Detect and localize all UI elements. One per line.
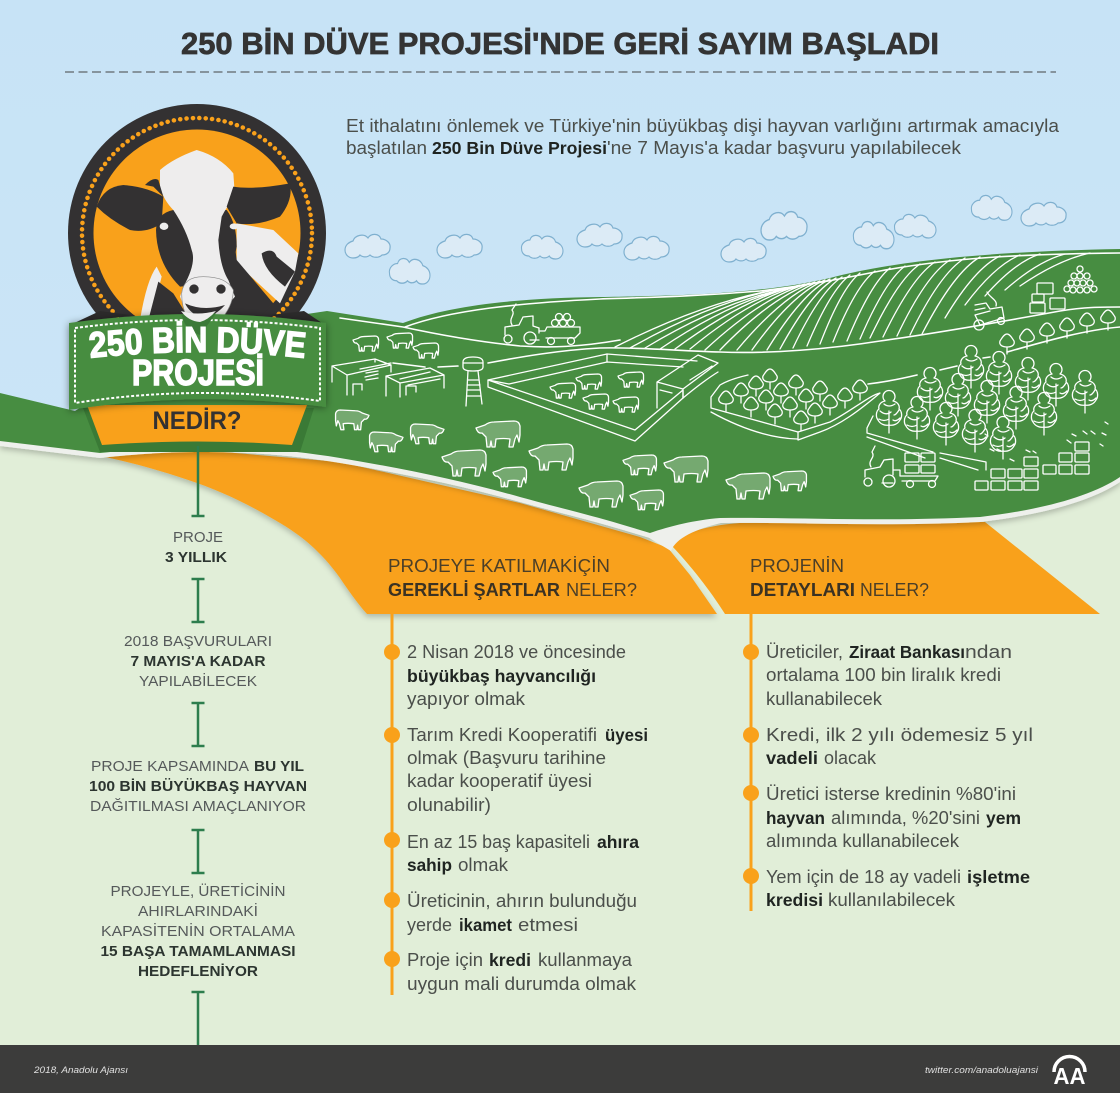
clouds	[345, 195, 1066, 284]
fact: animal target: 100 BİN BÜYÜKBAŞ HAYVAN	[89, 778, 307, 795]
hill contour lines	[340, 253, 1120, 384]
condition 2	[407, 725, 648, 815]
condition 5: kullanmaya	[538, 950, 633, 970]
detail 4: işletme	[967, 867, 1030, 887]
fact: applications: YAPILABİLECEK	[139, 672, 257, 690]
intro text: başlatılan	[346, 138, 427, 158]
detail 1: Üreticiler,	[766, 642, 843, 662]
farm buildings	[332, 359, 444, 397]
fact: applications: 2018 BAŞVURULARI	[124, 634, 272, 650]
intro text: 'ne 7 Mayıs'a kadar başvuru yapılabilecek	[607, 138, 962, 158]
detail 2: Kredi, ilk 2 yılı ödemesiz 5 yıl	[766, 725, 1033, 745]
cattle pen and barn	[488, 354, 718, 441]
fact: capacity target: AHIRLARINDAKİ	[138, 902, 258, 920]
detail 4: kullanılabilecek	[828, 890, 956, 910]
medallion circle	[68, 104, 326, 362]
sky background	[0, 0, 1120, 480]
detail 3: yem	[986, 808, 1021, 828]
condition 3	[407, 832, 639, 875]
tree row	[1000, 310, 1115, 354]
road lines	[867, 416, 986, 470]
ribbon folds	[70, 311, 325, 326]
detail 3: Üretici isterse kredinin %80'ini	[766, 784, 1016, 804]
badge: cow medallion and ribbon: PROJESİ	[132, 352, 264, 393]
condition 3: sahip	[407, 855, 452, 875]
orange tab	[87, 405, 307, 445]
outline cows near sheds and in pen	[353, 333, 644, 412]
condition 2: üyesi	[605, 725, 648, 745]
detail 2	[766, 725, 1033, 768]
orange banner: details	[672, 522, 1100, 614]
hay bales top right	[1030, 266, 1097, 313]
heading: details: PROJENİN	[750, 556, 844, 576]
condition 1: 2 Nisan 2018 ve öncesinde	[407, 642, 626, 662]
badge: cow medallion and ribbon: 250 BİN DÜVE	[89, 320, 306, 358]
tractor with square bales	[864, 446, 938, 488]
fact: project duration	[165, 530, 228, 566]
detail 3: alımında, %20'sini	[831, 808, 980, 828]
intro text: 250 Bin Düve Projesi	[432, 138, 607, 158]
condition 3: En az 15 baş kapasiteli	[407, 832, 590, 852]
intro text: Et ithalatını önlemek ve Türkiye'nin büyükbaş dişi hayvan varlığını artırmak amacıyla	[346, 116, 1060, 136]
cow portrait	[97, 150, 298, 323]
detail 2: olacak	[824, 748, 877, 768]
fact: animal target	[89, 759, 307, 815]
fact: applications	[124, 634, 272, 690]
condition 3: olmak	[458, 855, 509, 875]
copyright: 2018, Anadolu Ajansı	[33, 1065, 128, 1076]
fact: animal target: DAĞITILMASI AMAÇLANIYOR	[90, 798, 306, 815]
detail 3: alımında kullanabilecek	[766, 831, 960, 851]
badge: cow medallion and ribbon	[64, 104, 330, 452]
list: details	[743, 613, 1033, 911]
fact: capacity target: HEDEFLENİYOR	[138, 963, 259, 980]
large trees	[876, 346, 1098, 459]
orchard	[711, 369, 880, 440]
condition 5: uygun mali durumda olmak	[407, 974, 637, 994]
fact: animal target: PROJE KAPSAMINDA	[91, 759, 249, 775]
heading: details: NELER?	[860, 580, 929, 600]
fact: applications: 7 MAYIS'A KADAR	[130, 654, 266, 670]
fact: capacity target: PROJEYLE, ÜRETİCİNİN	[110, 882, 286, 900]
chin overlapping ribbon	[181, 313, 216, 335]
detail 1: ndan	[965, 642, 1012, 662]
grazing cows	[336, 410, 806, 510]
NEDİR label: NEDİR?	[152, 407, 242, 435]
detail 3: hayvan	[766, 808, 825, 828]
heading: conditions: PROJEYE KATILMAKİÇİN	[388, 556, 610, 576]
tractor on hill	[974, 292, 1004, 330]
square bale stacks	[975, 422, 1108, 490]
condition 1	[407, 642, 626, 709]
condition 2: olunabilir)	[407, 795, 491, 815]
condition 4: etmesi	[518, 915, 578, 935]
lower light green background	[0, 440, 1120, 1050]
intro text	[346, 116, 1060, 158]
orange banner: conditions	[100, 450, 717, 614]
ribbon	[69, 314, 326, 410]
condition 2: Tarım Kredi Kooperatifi	[407, 725, 597, 745]
fact: capacity target	[100, 882, 296, 980]
condition 3: ahıra	[597, 832, 639, 852]
water tower	[463, 357, 483, 406]
condition 1: büyükbaş hayvancılığı	[407, 666, 596, 686]
heading: details: DETAYLARI	[750, 580, 855, 600]
detail 3	[766, 784, 1021, 851]
detail 1: ortalama 100 bin liralık kredi	[766, 665, 1001, 685]
detail 4	[766, 867, 1030, 910]
heading: conditions: GEREKLİ ŞARTLAR	[388, 580, 560, 600]
condition 2: olmak (Başvuru tarihine	[407, 748, 606, 768]
fact: capacity target: KAPASİTENİN ORTALAMA	[101, 922, 295, 940]
detail 4: kredisi	[766, 890, 823, 910]
left timeline connectors	[192, 446, 204, 1045]
badge title	[80, 352, 315, 359]
fact: project duration: 3 YILLIK	[165, 550, 228, 566]
condition 1: yapıyor olmak	[407, 689, 526, 709]
footer	[0, 1045, 1120, 1093]
heading: conditions: NELER?	[566, 580, 637, 600]
condition 4: ikamet	[459, 915, 512, 935]
green hills and farm scene	[0, 249, 1120, 551]
icon: AA logo: AA	[1054, 1063, 1086, 1089]
condition 4	[407, 891, 637, 935]
condition 5	[407, 950, 637, 994]
condition 5: Proje için	[407, 950, 483, 970]
detail 2: vadeli	[766, 748, 818, 768]
fact: project duration: PROJE	[173, 530, 223, 546]
tractor with round bales	[504, 304, 580, 344]
detail 1	[766, 642, 1012, 709]
title: 250 BİN DÜVE PROJESİ'NDE GERİ SAYIM BAŞLADI	[181, 26, 939, 61]
detail 4: Yem için de 18 ay vadeli	[766, 867, 961, 887]
condition 5: kredi	[489, 950, 531, 970]
condition 4: yerde	[407, 915, 452, 935]
ploughed field furrows	[615, 253, 1090, 350]
heading: conditions	[388, 556, 637, 600]
heading: details	[750, 556, 929, 600]
list: conditions	[384, 613, 648, 995]
condition 2: kadar kooperatif üyesi	[407, 771, 592, 791]
detail 1: kullanabilecek	[766, 689, 883, 709]
fact: animal target: BU YIL	[254, 759, 304, 775]
fact: capacity target: 15 BAŞA TAMAMLANMASI	[100, 944, 296, 960]
twitter handle: twitter.com/anadoluajansi	[925, 1065, 1039, 1076]
condition 4: Üreticinin, ahırın bulunduğu	[407, 891, 637, 911]
detail 1: Ziraat Bankası	[849, 642, 965, 662]
